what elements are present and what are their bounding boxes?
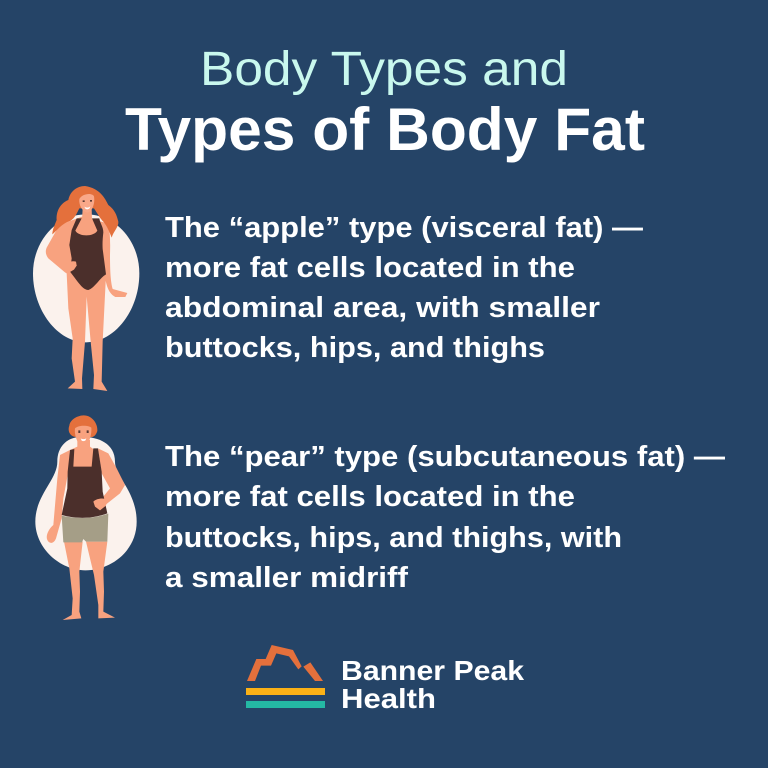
brown tank top xyxy=(62,448,107,518)
logo wordmark: Banner Peak xyxy=(341,655,524,686)
text block: apple type: buttocks, hips, and thighs xyxy=(165,332,545,364)
text block: apple type: The “apple” type (visceral fat) — xyxy=(165,212,643,244)
figure: pear body type xyxy=(35,415,137,620)
apple shape backdrop xyxy=(33,214,139,342)
arms and shoulders xyxy=(47,448,125,543)
face xyxy=(79,194,94,213)
text block: pear type: buttocks, hips, and thighs, with xyxy=(165,522,622,554)
logo mountain icon xyxy=(247,645,323,681)
eyes and smile xyxy=(78,430,89,433)
text block: pear type xyxy=(165,441,725,594)
body skin xyxy=(46,217,127,391)
hair xyxy=(52,186,118,238)
title line 2: Types of Body Fat xyxy=(125,96,645,163)
face xyxy=(75,426,91,447)
text block: pear type: more fat cells located in the xyxy=(165,481,575,513)
brown swimsuit xyxy=(69,218,106,290)
text block: apple type: abdominal area, with smaller xyxy=(165,292,600,324)
text block: apple type xyxy=(165,212,643,364)
text block: pear type: The “pear” type (subcutaneous fat) — xyxy=(165,441,725,473)
logo: Banner Peak Health: Health xyxy=(341,683,436,714)
legs xyxy=(63,542,115,620)
neck and chest xyxy=(70,440,95,468)
logo yellow stripe xyxy=(246,688,325,695)
title line 1: Body Types and xyxy=(200,43,568,96)
logo: Banner Peak Health xyxy=(246,645,524,714)
hand on hip xyxy=(64,261,77,272)
figure: apple body type xyxy=(33,186,139,391)
red curly hair xyxy=(69,415,97,437)
khaki shorts xyxy=(62,514,108,542)
neck xyxy=(82,208,92,220)
title xyxy=(125,43,645,163)
pear shape backdrop xyxy=(35,437,137,570)
eyes and smile xyxy=(83,200,92,202)
text block: apple type: more fat cells located in the xyxy=(165,252,575,284)
hand on hip xyxy=(93,499,107,510)
text block: pear type: a smaller midriff xyxy=(165,562,408,594)
logo teal stripe xyxy=(246,701,325,708)
